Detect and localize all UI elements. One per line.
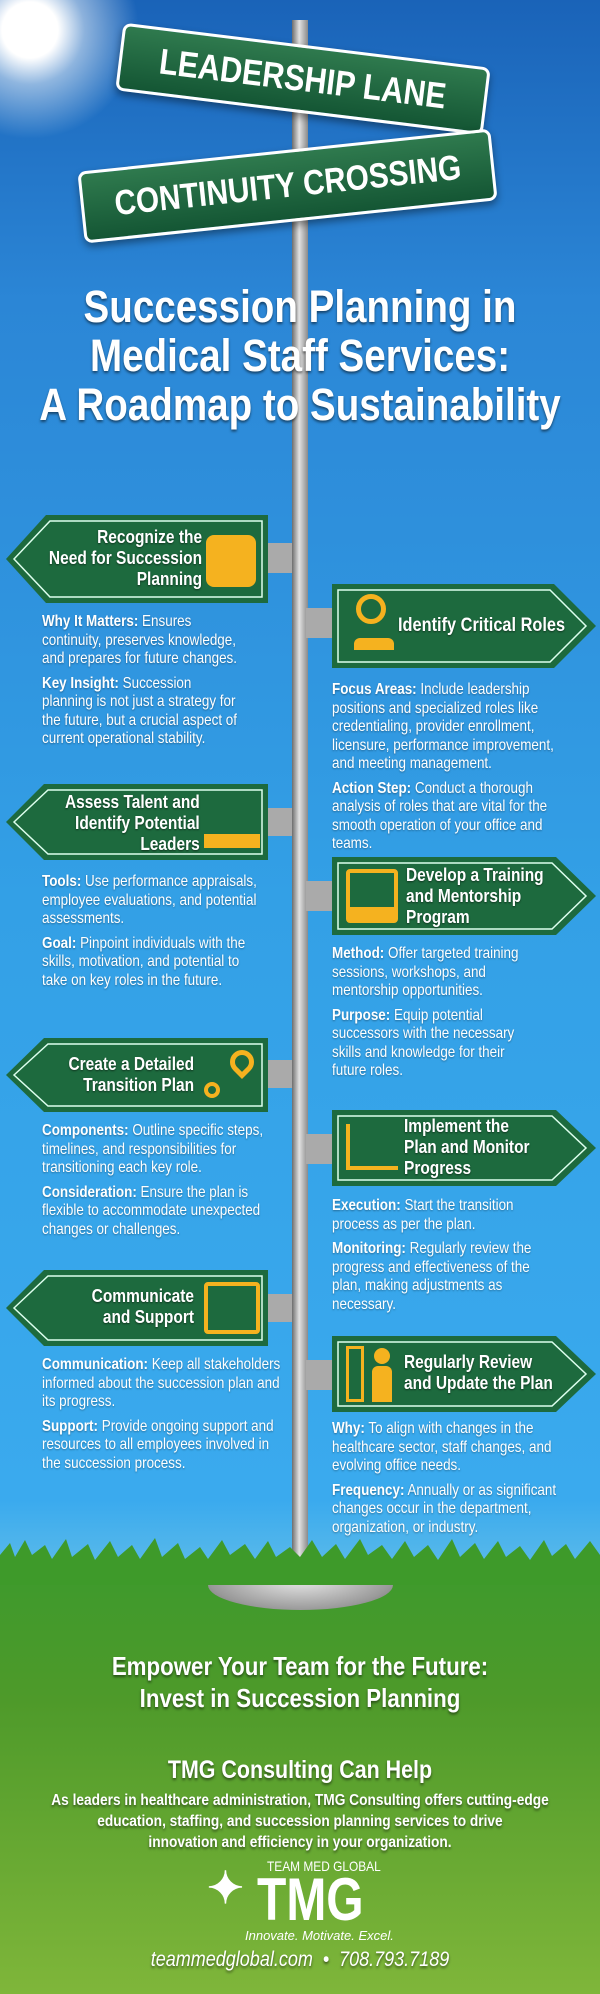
sign: communicate bbox=[6, 1270, 292, 1346]
paragraph: As leaders in healthcare administration, TMG Consulting offers cutting-edge bbox=[51, 1792, 549, 1809]
sign: review and update: Regularly Review bbox=[404, 1352, 532, 1372]
sign: transition plan: Transition Plan bbox=[83, 1075, 194, 1095]
sign: identify critical roles bbox=[306, 584, 596, 668]
paragraph: innovation and efficiency in your organization. bbox=[148, 1834, 452, 1851]
sign: training and mentorship: and Mentorship bbox=[406, 886, 521, 906]
pole base bbox=[208, 1560, 393, 1610]
icon: route pins bbox=[204, 1050, 254, 1098]
sign: recognize the need: Need for Succession bbox=[49, 548, 202, 568]
logo: TEAM MED GLOBAL bbox=[267, 1858, 381, 1874]
tmg heading: TMG Consulting Can Help bbox=[168, 1756, 432, 1784]
logo: Innovate. Motivate. Excel. bbox=[245, 1928, 394, 1943]
icon: network bbox=[204, 1282, 260, 1334]
title: Succession Planning in bbox=[84, 281, 516, 332]
sign: communicate: Communicate bbox=[92, 1286, 194, 1306]
sign: assess talent: Leaders bbox=[141, 834, 200, 854]
text: recognize: Why It Matters: Ensures continuity, preserves knowledge, and prepares for future changes. bbox=[42, 613, 237, 667]
sign: training and mentorship: Develop a Training bbox=[406, 865, 544, 885]
contact: teammedglobal.com • 708.793.7189 bbox=[151, 1948, 449, 1971]
icon: training bbox=[346, 869, 398, 923]
text: transition: Components: Outline specific steps, timelines, and responsibilities for transitioning each key role. bbox=[42, 1122, 263, 1176]
grass bbox=[0, 1538, 600, 1585]
icon: chart bbox=[346, 1124, 398, 1170]
street sign: leadership lane bbox=[115, 23, 491, 135]
sign: assess talent: Identify Potential bbox=[75, 813, 200, 833]
sign: assess talent: Assess Talent and bbox=[65, 792, 200, 812]
sign: identify critical roles: Identify Critical Roles bbox=[398, 615, 565, 636]
sun glow bbox=[0, 0, 140, 140]
text: communicate: Communication: Keep all stakeholders informed about the succession plan and its progress. bbox=[42, 1356, 280, 1410]
text: assess: Tools: Use performance appraisals, employee evaluations, and potential assessments. bbox=[42, 873, 257, 927]
sign: training and mentorship bbox=[306, 857, 596, 935]
sign: implement: Plan and Monitor bbox=[404, 1137, 530, 1157]
text: review bbox=[331, 1420, 556, 1538]
sign: review and update: and Update the Plan bbox=[404, 1373, 553, 1393]
street sign: leadership lane: LEADERSHIP LANE bbox=[157, 41, 449, 116]
text: implement: Execution: Start the transition process as per the plan. bbox=[332, 1197, 514, 1232]
street sign: continuity crossing: CONTINUITY CROSSING bbox=[113, 148, 463, 223]
street sign: continuity crossing bbox=[77, 129, 498, 243]
text: communicate bbox=[42, 1356, 280, 1473]
pole bbox=[292, 20, 308, 1580]
icon: podium people bbox=[204, 798, 260, 848]
text: recognize: Key Insight: Succession planning is not just a strategy for the future, but a crucial aspect of current operational stability. bbox=[42, 674, 237, 747]
text: identify bbox=[332, 681, 554, 852]
sign: recognize the need: Planning bbox=[137, 569, 202, 589]
logo: ✦ bbox=[207, 1864, 244, 1913]
sign: implement bbox=[306, 1110, 596, 1186]
text: implement bbox=[332, 1197, 532, 1314]
closing heading bbox=[112, 1651, 488, 1716]
text: assess: Goal: Pinpoint individuals with the skills, motivation, and potential to take on key roles in the future. bbox=[42, 934, 245, 988]
sign: review and update bbox=[306, 1336, 596, 1412]
sign: communicate: and Support bbox=[103, 1307, 194, 1327]
text: assess bbox=[41, 873, 257, 990]
sign: recognize the need: Recognize the bbox=[97, 527, 202, 547]
text: develop: Purpose: Equip potential successors with the necessary skills and knowledge for their future roles. bbox=[332, 1006, 514, 1079]
sign: implement: Implement the bbox=[404, 1116, 509, 1136]
icon: magnifier people bbox=[354, 594, 394, 650]
sign: assess talent bbox=[6, 784, 292, 860]
text: review: Why: To align with changes in the healthcare sector, staff changes, and evolving office needs. bbox=[332, 1420, 551, 1474]
paragraph: education, staffing, and succession planning services to drive bbox=[97, 1813, 503, 1830]
sign: recognize the need bbox=[6, 515, 292, 603]
sign: transition plan: Create a Detailed bbox=[68, 1054, 194, 1074]
text: implement: Monitoring: Regularly review the progress and effectiveness of the plan, making adjustments as necessary. bbox=[332, 1240, 531, 1312]
title bbox=[39, 281, 562, 434]
text: develop bbox=[332, 945, 518, 1079]
sign: implement: Progress bbox=[404, 1158, 471, 1178]
logo bbox=[207, 1858, 394, 1943]
sign: transition plan bbox=[6, 1038, 292, 1112]
title: Medical Staff Services: bbox=[90, 330, 510, 381]
title: A Roadmap to Sustainability bbox=[39, 379, 561, 430]
icon: checklist person bbox=[346, 1346, 392, 1402]
text: transition bbox=[42, 1122, 263, 1240]
text: recognize bbox=[41, 613, 238, 748]
text: identify: Focus Areas: Include leadership positions and specialized roles like credentialing, provider enrollment, licensure, performance improvement, and meeting management. bbox=[332, 681, 554, 772]
text: review: Frequency: Annually or as significant changes occur in the department, organization, or industry. bbox=[332, 1482, 556, 1536]
text: identify: Action Step: Conduct a thorough analysis of roles that are vital for the smooth operation of your office and teams. bbox=[332, 780, 547, 852]
text: transition: Consideration: Ensure the plan is flexible to accommodate unexpected changes or challenges. bbox=[42, 1184, 260, 1238]
icon: puzzle bbox=[206, 535, 256, 587]
closing heading: Invest in Succession Planning bbox=[140, 1683, 460, 1713]
logo: TMG bbox=[257, 1866, 364, 1933]
paragraph bbox=[50, 1792, 550, 1854]
text: communicate: Support: Provide ongoing support and resources to all employees involved in the succession process. bbox=[42, 1418, 274, 1472]
closing heading: Empower Your Team for the Future: bbox=[112, 1651, 488, 1681]
text: develop: Method: Offer targeted training sessions, workshops, and mentorship opportunities. bbox=[332, 945, 518, 999]
sign: training and mentorship: Program bbox=[406, 907, 470, 927]
